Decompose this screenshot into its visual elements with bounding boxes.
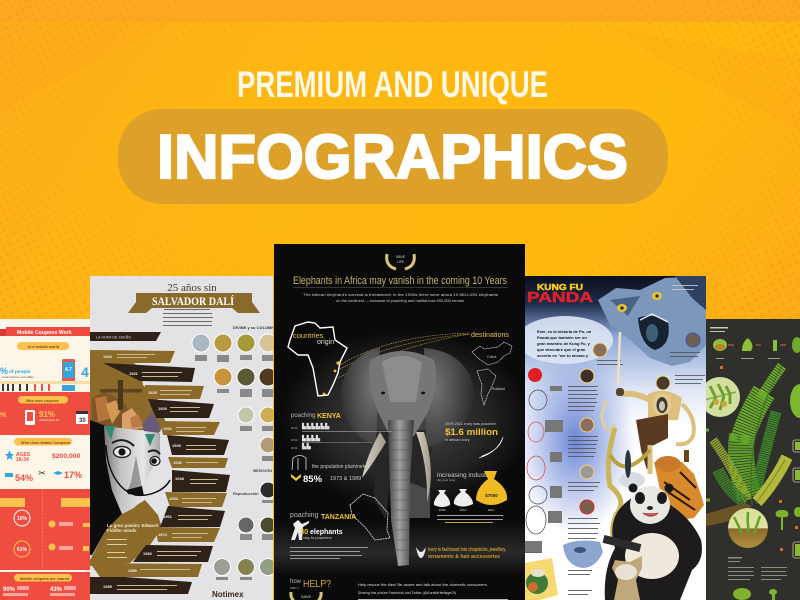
chart: increasing industry money bags: $7000	[485, 493, 498, 498]
heading banner: salvador dali: SALVADOR DALÍ	[152, 294, 234, 308]
timeline ribbons: 1961	[163, 514, 173, 519]
panel: salvador dali infographic	[90, 276, 277, 600]
text: ivory uses: Ivory is fashioned into chopsticks, jewellery,	[428, 547, 506, 553]
gallery heading: DIVINE y su COLUMNA	[233, 325, 277, 330]
source logo: notimex: Notimex	[212, 590, 244, 599]
section: how can i help: can I	[290, 585, 299, 590]
timeline ribbons: 1929	[158, 406, 168, 411]
timeline ribbons: 1953	[169, 496, 179, 501]
body and legs	[374, 430, 432, 520]
timeline ribbons: 1931	[163, 426, 173, 431]
glow behind elephant	[294, 340, 517, 500]
red seal	[528, 368, 542, 382]
background	[0, 0, 800, 330]
section: how can i help: SAVE	[301, 594, 312, 599]
emblem: laurel logo: SAVE	[396, 255, 406, 259]
ears	[340, 348, 380, 445]
panel section: saving money: 90%	[3, 587, 16, 593]
icon: phone	[62, 359, 75, 391]
map labels: countries of origin: origin	[317, 339, 334, 346]
arcs to destinations	[338, 333, 470, 378]
stat: percent of people: smart phones and eBay	[2, 375, 34, 379]
stat: 1.6 million: in african ivory	[445, 438, 470, 442]
section: poaching tanzania: elephants	[310, 529, 343, 536]
timeline ribbons: 1904	[103, 354, 113, 359]
section: poaching kenya: 2011	[291, 446, 298, 450]
trunk	[388, 420, 414, 566]
section: poaching tanzania	[290, 494, 390, 540]
label: reproduccion: Reproducción	[233, 492, 259, 496]
monkey character	[616, 332, 694, 474]
title: Elephants in Africa may vanish in the coming 10 Years	[293, 275, 507, 287]
stat: 1.6 million: 2009-2011 Ivory was poached	[445, 422, 496, 426]
stat: four: 4	[81, 364, 89, 380]
section pill: mobile world: In a mobile world	[28, 345, 60, 349]
chart: increasing industry money bags: 2010	[460, 508, 467, 512]
intro text: The African elephant's survival is threatened: in the 1930s there were about 10 MILLION elephants	[303, 293, 498, 297]
panel section: who uses mobile coupons: 54%	[15, 473, 33, 483]
panel: fern botanical infographic	[700, 319, 800, 600]
skyline of people	[0, 381, 90, 391]
panel section: who uses mobile coupons: Who Uses Mobile Coupons	[21, 441, 70, 445]
nose	[128, 456, 142, 490]
map labels: countries of origin: countries	[293, 331, 324, 340]
tusks	[362, 432, 386, 478]
heading text	[710, 327, 728, 332]
panel: kung fu panda infographic	[515, 276, 706, 600]
panda character	[603, 484, 702, 600]
subtitle: premium and unique: PREMIUM AND UNIQUE	[237, 64, 548, 105]
stat: 1.6 million	[445, 422, 503, 458]
panel: mobile coupons infographic	[0, 319, 90, 600]
magnified circle: soil	[728, 508, 768, 548]
logo: kung fu panda: KUNG FU	[537, 282, 583, 292]
map: thailand	[477, 369, 505, 405]
timeline ribbons: 1974	[158, 532, 168, 537]
emblem: laurel logo: LIFE	[397, 260, 405, 264]
heading banner: salvador dali	[128, 293, 260, 313]
stat: population plummeted 85 percent: 1973 & 1989	[330, 476, 361, 482]
text: ivory uses	[428, 547, 506, 560]
section label: MEDICIÓN	[253, 468, 272, 473]
panel section: saving money: 43%	[50, 587, 63, 593]
collage: hat of paintings	[92, 380, 160, 438]
intro text	[537, 329, 592, 358]
section: how can i help	[290, 579, 508, 600]
intro text: Este, es la historia de Po, un	[537, 329, 592, 334]
section: how can i help: Sharing this picture Facebook and Twitter (@AureliaHeritageOf)	[358, 591, 456, 595]
timeline ribbons: 1921	[129, 371, 139, 376]
sketches of panda	[526, 390, 547, 534]
icon: tusks	[416, 547, 426, 558]
villain face	[598, 276, 706, 366]
panel section: who uses coupons: visited store for	[39, 418, 59, 422]
turtle character	[563, 541, 603, 568]
section: how can i help: HELP?	[303, 579, 331, 590]
map: china: China	[487, 355, 496, 359]
gallery captions	[195, 355, 273, 580]
chart: increasing industry money bags: 2011	[488, 508, 495, 512]
section: poaching kenya: ▙▙▙▙	[301, 434, 321, 442]
panel section: who uses coupons: %	[0, 412, 7, 419]
captions bottom	[525, 552, 592, 595]
timeline ribbons: 1948	[175, 476, 185, 481]
shifu character	[612, 556, 642, 600]
tiger character	[654, 450, 704, 520]
panel section: who uses mobile coupons: 17%	[64, 470, 82, 480]
elephant illustration	[340, 348, 475, 566]
panel section: saving money: Mobile coupons are shared	[20, 577, 70, 581]
body text blocks	[568, 285, 705, 539]
stat: population plummeted 85 percent: 85%	[303, 474, 323, 485]
snake and crane	[602, 400, 650, 545]
panel section: saving money	[0, 489, 90, 600]
chart: increasing industry money bags: increasing industry	[437, 472, 492, 479]
intro text: Panda que también ser un	[537, 335, 587, 340]
intro paragraph	[163, 309, 213, 326]
stat: percent of people: of people	[9, 369, 31, 375]
bottom left text box: Fiddler minds	[107, 528, 137, 533]
ribbon label: LA HORA DE SUEÑO	[96, 334, 131, 340]
panel section: saving money: 61%	[17, 547, 28, 553]
emblem: laurel logo	[387, 254, 414, 269]
map: china	[472, 342, 512, 365]
orange arrows	[779, 500, 798, 551]
sketch captions	[525, 386, 563, 553]
face	[104, 426, 160, 514]
header ribbon	[0, 327, 90, 336]
pill banner: infographics	[118, 109, 668, 204]
stat: population plummeted 85 percent: the population plummeted	[312, 464, 370, 470]
stat: percent of people	[0, 368, 34, 378]
section pill: mobile world	[17, 342, 69, 350]
right side plants	[706, 384, 800, 558]
section: poaching tanzania: poaching	[290, 512, 319, 519]
chart: increasing industry money bags: this year rang	[437, 478, 456, 482]
logo: kung fu panda	[527, 282, 593, 306]
intro text	[303, 293, 498, 303]
icon captions	[716, 358, 780, 369]
logo: kung fu panda: PANDA	[527, 289, 593, 306]
teal ornaments	[105, 426, 115, 440]
timeline ribbons: 1940	[173, 460, 183, 465]
bottom left text box	[107, 523, 158, 558]
pill banner: infographics: INFOGRAPHICS	[157, 123, 628, 192]
map: thailand: Thailand	[491, 387, 505, 391]
map: africa outline	[288, 322, 347, 396]
lifecycle icons row	[713, 337, 800, 353]
section: poaching kenya: ▙▙▙▙▙▙	[301, 422, 330, 430]
section: poaching kenya: 2012	[291, 438, 298, 442]
stat: population plummeted 85 percent	[291, 456, 370, 485]
section: poaching kenya: ▙▙	[301, 442, 312, 450]
section: how can i help: how	[290, 579, 302, 585]
heading: 25 anos sin: 25 años sin	[167, 282, 217, 294]
timeline ribbons: 1939	[172, 443, 182, 448]
section: how can i help: Help rescue the tiles! Be aware and talk about the domestic consumers.	[358, 583, 488, 587]
note text	[290, 547, 368, 559]
panel section: who uses coupons: 91%	[39, 410, 55, 419]
timeline ribbons: 1925	[148, 390, 158, 395]
title rule	[293, 287, 508, 288]
chart: increasing industry money bags	[434, 471, 507, 523]
portrait: dali face collage	[90, 380, 170, 555]
ribbon label	[90, 332, 161, 341]
panel section: who uses mobile coupons	[5, 438, 82, 483]
stat: percent of people: %	[0, 366, 8, 376]
stat: 1.6 million: $1.6 million	[445, 427, 498, 438]
brown silhouette behind head	[90, 350, 165, 432]
map labels: countries of origin	[293, 331, 340, 395]
panel section: who uses mobile coupons: AGES	[16, 452, 31, 458]
label: destinations: destinations	[471, 330, 509, 339]
intro text: secreto es "ser tú mismo y	[537, 353, 589, 358]
panel section: who uses mobile coupons: $200,000	[52, 453, 81, 460]
body text	[728, 557, 787, 580]
section: poaching tanzania: TANZANIA	[321, 514, 356, 521]
mustache	[106, 445, 170, 495]
timeline ribbons: 1989	[103, 584, 113, 589]
panel section: who uses coupons: Who uses coupons	[26, 399, 59, 403]
bottom plants	[733, 588, 777, 600]
gallery of circular paintings	[192, 334, 277, 576]
bottom left text box: La gran pasión: Edward	[107, 523, 158, 528]
section: poaching kenya: KENYA	[317, 413, 341, 420]
timeline ribbons: 1983	[143, 551, 153, 556]
intro text: que descubre que el gran	[537, 347, 586, 352]
intro text: gran maestro de Kung Fu, y	[537, 341, 591, 346]
section: poaching kenya: poaching	[291, 413, 315, 419]
section: poaching kenya	[291, 413, 392, 450]
section: poaching kenya: 2013	[291, 426, 298, 430]
eyes	[114, 446, 130, 458]
hair	[90, 420, 122, 555]
head	[369, 351, 436, 436]
bottom left poster	[525, 558, 558, 600]
timeline ribbons	[90, 350, 230, 594]
panel: elephants infographic	[274, 244, 530, 600]
panel section: saving money: 10%	[17, 516, 28, 522]
intro text: on the continent — because of poaching and habitat loss 500,000 remain	[336, 299, 464, 303]
panel section: who uses mobile coupons: 18-34	[16, 457, 29, 463]
panel section: who uses coupons	[0, 392, 90, 435]
fern fronds	[713, 366, 787, 505]
root	[706, 503, 752, 526]
section: poaching tanzania: a day to poachers	[300, 535, 332, 540]
section: poaching tanzania: 30	[300, 527, 308, 536]
brown lower block	[90, 500, 162, 566]
header ribbon: Mobile Coupons Work	[17, 330, 72, 336]
chart: increasing industry money bags: 2009	[439, 508, 446, 512]
panel section: who uses coupons: 30	[79, 418, 86, 424]
panel section: who uses mobile coupons: ✂	[38, 468, 46, 478]
text: ivory uses: ornaments & hair accessories	[428, 554, 500, 560]
magnified circle: leaf detail	[700, 377, 740, 417]
timeline ribbons: 1989	[128, 568, 138, 573]
portraits	[580, 333, 700, 590]
icon: phone: 4.7	[65, 367, 72, 373]
